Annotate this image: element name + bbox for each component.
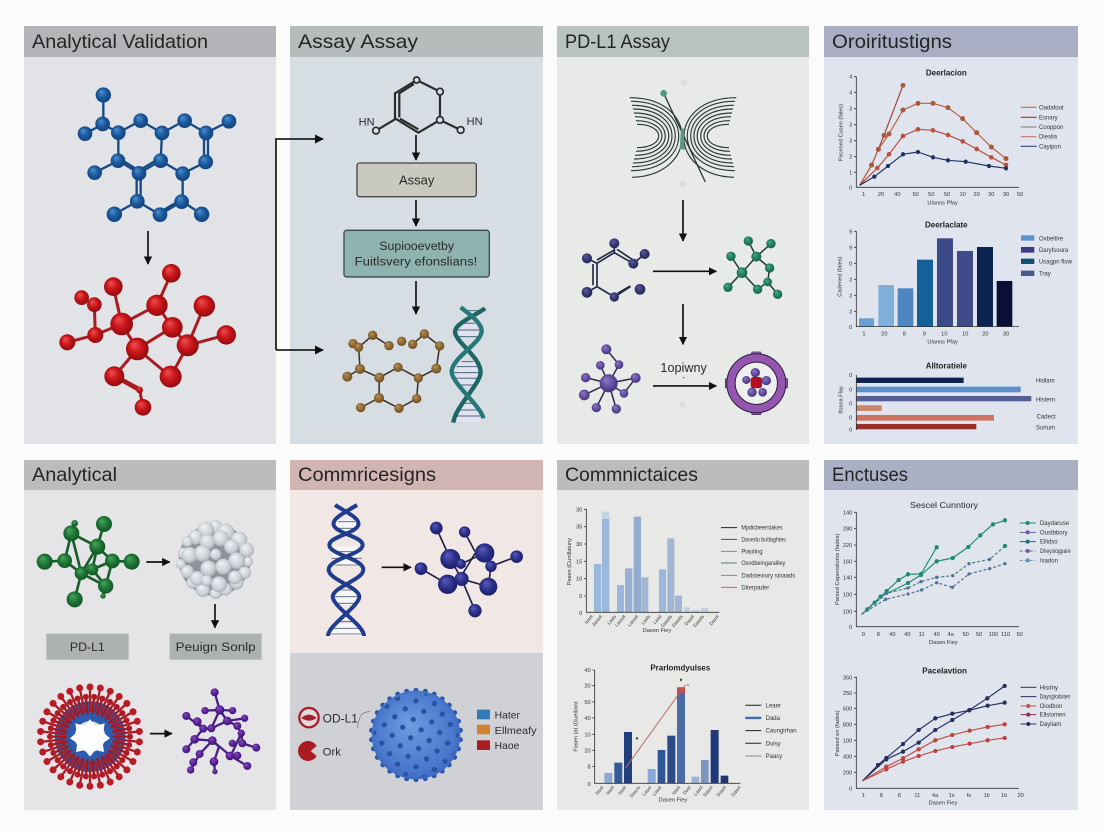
box: Assay: Assay (399, 172, 435, 187)
label: 1opiwny with arrow: 1opiwny (660, 361, 708, 375)
bar chart: light blue: 30 (576, 542, 582, 548)
bar chart: light blue: Dasels (692, 614, 706, 628)
line chart: Pacelavtion: 400 (843, 754, 852, 760)
line chart: Pacelavtion: 1s (949, 793, 955, 799)
line chart: Sescel Cunntiory: Sescel Cunntiory (910, 500, 979, 510)
heading: Commricesigns (290, 460, 543, 490)
horizontal bar chart: Alltoratiele: Surlum (1036, 425, 1055, 431)
arrow: arcs to molecules (680, 200, 685, 241)
icon: teal DNA helix (452, 307, 485, 423)
line chart: Sescel Cunntiory: 100 (843, 609, 852, 615)
line chart: Sescel Cunntiory: 110 (1001, 632, 1010, 638)
bar chart: Prarlomdyulses: Dasos (629, 785, 642, 798)
line chart: Deerlacion: Deerlacion (926, 69, 967, 78)
icon: red molecule (59, 264, 236, 416)
icon: brown molecule (342, 329, 444, 413)
line chart: Pacelavtion: 1ti (984, 793, 990, 799)
horizontal bar chart: Alltoratiele: Hidlam (1036, 379, 1055, 385)
line chart: Sescel Cunntiory: 100 (843, 592, 852, 598)
bar chart: Prarlomdyulses: 20 (584, 684, 591, 690)
icon: HN ring structure: HN (359, 116, 375, 128)
bar chart: Prarlomdyulses: Prarlomdyulses (650, 663, 711, 672)
arrow: Assay to teal box (413, 200, 418, 226)
line chart: Deerlacion: 0 (849, 186, 852, 192)
icon: blue spiked sphere (357, 680, 475, 790)
legend: line chart: Dieslia (1039, 135, 1058, 141)
line chart: Sescel Cunntiory: 140 (843, 510, 852, 516)
line chart: Deerlacion: 50 (944, 192, 950, 198)
legend: line chart: Esnary (1039, 115, 1058, 121)
legend: Sescel Cunntiory: Daydaruse (1040, 521, 1070, 527)
bar chart: light blue (567, 507, 795, 634)
legend: Pacelavtion: Ellsiomen (1040, 713, 1066, 719)
legend: bar chart: Tray (1039, 272, 1051, 278)
line chart: Sescel Cunntiory: 100 (989, 632, 998, 638)
legend: light blue bars: Dadsteviory sinaads (741, 573, 795, 579)
bar chart: Prarlomdyulses: Dasen Fiey (659, 797, 687, 803)
horizontal bar chart: Alltoratiele: 0 (849, 401, 852, 407)
line chart: Pacelavtion: Passed en (fades) (835, 710, 841, 756)
heading: Assay Assay (290, 26, 543, 57)
line chart: Deerlacion: 30 (1003, 192, 1009, 198)
panel: Enctuses charts (824, 460, 1078, 810)
bar chart: Prarlomdyulses: Dasel (716, 785, 727, 797)
bar chart: light blue: Lasls (606, 614, 618, 626)
legend: Prarlomdyulses: Duisy (766, 741, 781, 747)
line chart: Pacelavtion: Pacelavtion (922, 666, 967, 675)
panel: Assay Assay (290, 26, 543, 444)
panel: Oroiritustigns charts (824, 26, 1078, 444)
line chart: Pacelavtion: 11 (914, 793, 920, 799)
legend: bar chart: Daryfsoura (1039, 248, 1069, 254)
horizontal bar chart: Alltoratiele: Cadect (1037, 415, 1056, 421)
icon: blue molecule (78, 87, 236, 222)
line chart: Pacelavtion: Dasen Fiey (929, 801, 957, 807)
bar chart: Prarlomdyulses: Lasnl (693, 785, 704, 797)
legend: light blue bars: Piaoling (741, 549, 763, 555)
bar chart: Deerlaclate: 9 (849, 229, 852, 235)
heading: Commnictaices: Commnictaices (565, 464, 698, 486)
legend: line chart: Cayipon (1039, 144, 1061, 150)
bar chart: Prarlomdyulses: ♦ (636, 736, 639, 742)
legend: Prarlomdyulses: Leaer (766, 703, 781, 709)
arrow: cluster to label (212, 604, 217, 628)
line chart: Deerlacion: 30 (988, 192, 994, 198)
line chart: Pacelavtion: 200 (843, 770, 852, 776)
arrow: blue to red molecule (145, 231, 150, 264)
line chart: Deerlacion: 50 (928, 192, 934, 198)
icon: concentric arcs receptor (630, 79, 736, 408)
bar chart: Deerlaclate: 3 (849, 309, 852, 315)
line chart: Sescel Cunntiory: 50 (1016, 632, 1023, 638)
icon: HN ring structure: HN (467, 116, 483, 128)
panel: Commnictaices charts (557, 460, 809, 810)
icon: purple network molecule (182, 688, 260, 774)
heading: Oroiritustigns (824, 26, 1078, 57)
legend: sphere colours: Hater (495, 710, 520, 721)
box: teal description (344, 230, 489, 277)
bar chart: Prarlomdyulses: ♦ (680, 677, 683, 683)
icon: Ork key (298, 741, 341, 761)
legend: Prarlomdyulses: Caungirhan (766, 729, 797, 735)
bar chart: Prarlomdyulses: Fasen (at (Guetliant (574, 701, 580, 752)
bar chart: Prarlomdyulses: 20 (584, 748, 591, 754)
line chart: Deerlacion: 50 (1017, 192, 1023, 198)
bar chart: Deerlaclate: 20 (881, 331, 887, 337)
bar chart: Prarlomdyulses: ^ (686, 684, 689, 690)
bar chart: light blue: Dasels (671, 614, 684, 628)
line chart: Sescel Cunntiory: 4a (948, 632, 955, 638)
line chart: Pacelavtion: 8 (898, 793, 901, 799)
legend: Pacelavtion (1021, 685, 1070, 728)
icon: Ork key: Ork (323, 746, 341, 758)
box: Assay (357, 163, 476, 197)
heading: Commricesigns: Commricesigns (298, 464, 436, 486)
bar chart: Deerlaclate: 0 (849, 261, 852, 267)
legend: Prarlomdyulses: Dada (766, 716, 781, 722)
bar chart: Prarlomdyulses: Lasel (641, 785, 652, 797)
line chart: Deerlacion: 1 (862, 192, 865, 198)
bar chart: light blue: Dasel (684, 614, 695, 626)
horizontal bar chart: Alltoratiele: Alltoratiele (926, 361, 968, 370)
bar chart: Prarlomdyulses: Dasl (682, 785, 692, 795)
line chart: Deerlacion (838, 69, 1064, 207)
bar chart: light blue: 5 (579, 594, 582, 600)
line chart: Sescel Cunntiory: 220 (843, 543, 852, 549)
line chart: Sescel Cunntiory: 40 (934, 632, 940, 638)
horizontal bar chart: Alltoratiele (838, 361, 1056, 433)
legend: light blue bars: Mpdicbeerstakes (741, 526, 783, 532)
line chart: Pacelavtion: 800 (843, 722, 852, 728)
panel: Analytical Validation (24, 26, 276, 444)
line chart: Deerlacion: 40 (894, 192, 900, 198)
bar chart: light blue: Lassel (614, 614, 626, 628)
line chart: Sescel Cunntiory: 50 (963, 632, 969, 638)
heading: Assay Assay: Assay Assay (298, 31, 418, 53)
bar chart: Deerlaclate: 10 (941, 331, 947, 337)
bar chart: Prarlomdyulses: Dasel (702, 785, 714, 797)
line chart: Pacelavtion: fs (967, 793, 971, 799)
line chart: Pacelavtion: 0 (849, 787, 852, 793)
bar chart: Prarlomdyulses: 50 (584, 700, 591, 706)
line chart: Deerlacion: 10 (960, 192, 966, 198)
heading: Analytical: Analytical (32, 464, 117, 486)
heading: PD-L1 Assay (557, 26, 809, 57)
bar chart: Deerlaclate: 8 (903, 331, 906, 337)
arrow: ring to Assay box (413, 135, 418, 160)
legend: Pacelavtion: Dayliam (1040, 722, 1061, 728)
panel: PD-L1 Assay (557, 26, 809, 444)
legend: bar chart (1021, 235, 1073, 278)
label box: Peuign Sonlp: Peuign Sonlp (176, 640, 256, 654)
bar chart: Prarlomdyulses (574, 663, 797, 803)
bar chart: Prarlomdyulses: Lasel (651, 785, 662, 797)
bar chart: light blue: 10 (576, 577, 582, 583)
bar chart: light blue: Pasen (Cunillatuny (567, 538, 573, 585)
bar chart: Deerlaclate (838, 220, 1073, 346)
bar chart: Prarlomdyulses: Iasel (617, 785, 627, 796)
horizontal bar chart: Alltoratiele: 0 (849, 373, 852, 379)
line chart: Sescel Cunntiory: Dasen Fiey (929, 640, 958, 646)
heading: Commnictaices (557, 460, 809, 490)
line chart: Pacelavtion: 100 (843, 738, 852, 744)
line chart: Deerlacion: 1 (849, 170, 852, 176)
legend: Sescel Cunntiory: Isadon (1040, 558, 1058, 564)
legend: line chart (1021, 105, 1064, 150)
icon: OD-L1 key (299, 708, 370, 728)
bar chart: Deerlaclate: Cadened (fales) (838, 256, 844, 297)
line chart: Pacelavtion: 8 (880, 793, 883, 799)
bar chart: light blue: Dasen Fiey (643, 628, 671, 634)
legend: sphere colours (477, 710, 538, 752)
panel: Analytical (23, 460, 276, 810)
legend: Prarlomdyulses: Paasy (766, 754, 782, 760)
legend: Prarlomdyulses (745, 703, 797, 760)
legend: light blue bars: Diterpader (741, 585, 769, 591)
heading: Enctuses (824, 460, 1078, 490)
line chart: Sescel Cunntiory: 0 (862, 632, 865, 638)
line chart: Sescel Cunntiory (835, 500, 1071, 646)
bar chart: light blue: Iasel (584, 614, 594, 625)
bar chart: light blue: Lassel (627, 614, 639, 628)
bar chart: light blue: Dasels (660, 614, 674, 628)
line chart: Deerlacion: 20 (878, 192, 884, 198)
bar chart: Deerlaclate: Ulanos Pfay (927, 340, 958, 346)
line chart: Pacelavtion: 20 (1017, 793, 1024, 799)
bar chart: Prarlomdyulses: Dasnl (730, 785, 742, 797)
legend: line chart: Cooppon (1039, 125, 1063, 131)
bar chart: Deerlaclate: 0 (849, 325, 852, 331)
label box: PD-L1: PD-L1 (70, 640, 105, 654)
line chart: Pacelavtion: 250 (843, 691, 852, 697)
line chart: Sescel Cunntiory: 8 (877, 632, 880, 638)
legend: line chart: Oadafoot (1039, 105, 1064, 111)
bar chart: light blue: 15 (576, 559, 582, 565)
icon: blue DNA helix (328, 505, 364, 636)
legend: light blue bars: Oxndbeingaraliley (741, 561, 785, 567)
legend: light blue bars: Dasedu butlaghtes (741, 537, 786, 543)
arrow: teal box to molecule (413, 281, 418, 314)
label: 1opiwny with arrow (653, 361, 716, 386)
icon: OD-L1 key: OD-L1 (323, 712, 358, 726)
line chart: Pacelavtion: 600 (843, 706, 852, 712)
bar chart: Deerlaclate: 9 (849, 245, 852, 251)
line chart: Deerlacion: 4 (849, 90, 852, 96)
bar chart: Deerlaclate: 3 (849, 277, 852, 283)
bar chart: light blue: Lasls (640, 614, 652, 626)
bar chart: Deerlaclate: 30 (1003, 331, 1009, 337)
box: teal description: Fuitlsvery efonslians! (355, 255, 477, 269)
icon: purple ring with red core (725, 352, 788, 415)
horizontal bar chart: Alltoratiele: 0 (849, 427, 852, 433)
legend: bar chart: Usagpn flow (1039, 259, 1073, 265)
bar chart: Deerlaclate: 1 (862, 331, 866, 337)
bar chart: Prarlomdyulses: Iasel (605, 785, 615, 796)
legend: light blue bars (721, 526, 795, 591)
arrow: DNA to molecule (382, 565, 411, 570)
line chart: Sescel Cunntiory: 40 (889, 632, 895, 638)
legend: Sescel Cunntiory: Oustbbory (1040, 530, 1068, 536)
icon: indigo molecule (415, 522, 523, 617)
legend: sphere colours: Haoe (495, 741, 520, 752)
heading: Enctuses: Enctuses (832, 464, 908, 486)
line chart: Deerlacion: 50 (913, 192, 919, 198)
legend: Pacelavtion: Daysgloduten (1040, 695, 1070, 701)
line chart: Deerlacion: 4 (849, 75, 852, 81)
icon: red and blue micelle (23, 674, 157, 799)
heading: Analytical Validation: Analytical Validation (32, 31, 208, 53)
icon: HN ring structure (359, 77, 483, 134)
heading: Analytical (24, 460, 276, 490)
line chart: Sescel Cunntiory: 50 (976, 632, 982, 638)
arrow: navy to green molecule (653, 269, 716, 274)
arrow: micelle to purple molecule (150, 731, 172, 736)
line chart: Pacelavtion: 1 (862, 793, 865, 799)
legend: Sescel Cunntiory: Ellidso (1040, 540, 1058, 546)
line chart: Deerlacion: Ulanos Pfay (927, 201, 958, 207)
line chart: Deerlacion: 20 (974, 192, 980, 198)
legend: sphere colours: Ellmeafy (495, 726, 538, 737)
bar chart: Prarlomdyulses: 10 (584, 732, 591, 738)
legend: Pacelavtion: Hisdny (1040, 685, 1058, 691)
arrow: green molecule to cluster (146, 559, 170, 564)
line chart: Sescel Cunntiory: Parsed Capensilums (fades) (835, 534, 841, 605)
line chart: Deerlacion: 2 (849, 155, 852, 161)
line chart: Sescel Cunntiory: 280 (843, 527, 852, 533)
icon: navy ring molecule (582, 238, 650, 302)
bar chart: Prarlomdyulses: Iasel (594, 785, 604, 796)
bar chart: Deerlaclate: 10 (962, 331, 968, 337)
bar chart: light blue: Dasnl (708, 614, 720, 626)
label box: PD-L1 (46, 634, 129, 660)
line chart: Deerlacion: 3 (849, 123, 852, 129)
bar chart: light blue: 35 (576, 525, 582, 531)
bar chart: Deerlaclate: 3 (849, 293, 852, 299)
bar chart: light blue: 0 (579, 611, 582, 617)
bar chart: Deerlaclate: Deerlaclate (925, 220, 968, 229)
heading: Analytical Validation (24, 26, 276, 57)
bar chart: Deerlaclate: 20 (982, 331, 988, 337)
line chart: Sescel Cunntiory: 40 (904, 632, 910, 638)
label box: Peuign Sonlp (170, 634, 262, 660)
bar chart: Prarlomdyulses: 8 (588, 765, 591, 771)
line chart: Pacelavtion (835, 666, 1070, 807)
bar chart: light blue: 30 (576, 507, 582, 513)
bar chart: Prarlomdyulses: 40 (584, 716, 591, 722)
horizontal bar chart: Alltoratiele: Ifosoa Flay (838, 386, 844, 414)
line chart: Deerlacion: 3 (849, 107, 852, 113)
icon: purple star molecule (579, 344, 641, 414)
bar chart: light blue: Jassel (591, 614, 603, 627)
icon: green molecule (723, 236, 782, 299)
line chart: Deerlacion: 3 (849, 139, 852, 145)
bar chart: Prarlomdyulses: 0 (588, 782, 591, 788)
arrow: down to purple row (680, 304, 685, 344)
line chart: Pacelavtion: 4a (932, 793, 939, 799)
heading: PD-L1 Assay: PD-L1 Assay (565, 31, 670, 53)
horizontal bar chart: Alltoratiele: 0 (849, 387, 852, 393)
horizontal bar chart: Alltoratiele: 0 (849, 415, 852, 421)
icon: green molecule (37, 516, 140, 607)
legend: bar chart: Oxbeltlre (1039, 236, 1064, 242)
line chart: Sescel Cunntiory: 160 (843, 559, 852, 565)
line chart: Sescel Cunntiory: 11 (919, 632, 925, 638)
legend: Pacelavtion: Oiodbon (1040, 704, 1062, 710)
line chart: Sescel Cunntiory: 0 (849, 625, 852, 631)
arrow: bracket connector from Analytical Validation to Assay (276, 139, 323, 350)
bar chart: Prarlomdyulses: 40 (584, 668, 591, 674)
bar chart: Deerlaclate: 9 (923, 331, 926, 337)
box: teal description: Supiooevetby (379, 239, 455, 253)
line chart: Sescel Cunntiory: 140 (843, 575, 852, 581)
heading: Oroiritustigns: Oroiritustigns (832, 31, 952, 53)
legend: Sescel Cunntiory: Dheyslogpare (1040, 549, 1071, 555)
icon: gray sphere cluster (176, 520, 254, 599)
bar chart: Prarlomdyulses: Iasel (671, 785, 681, 796)
line chart: Pacelavtion: 1ti (1001, 793, 1007, 799)
line chart: Pacelavtion: 350 (843, 675, 852, 681)
panel: Commricesigns (290, 460, 543, 810)
horizontal bar chart: Alltoratiele: Histern (1036, 397, 1055, 403)
line chart: Deerlacion: Pacened Cusen (fales) (838, 104, 844, 161)
legend: Sescel Cunntiory (1020, 521, 1071, 564)
bar chart: light blue: Lasd (652, 614, 663, 625)
